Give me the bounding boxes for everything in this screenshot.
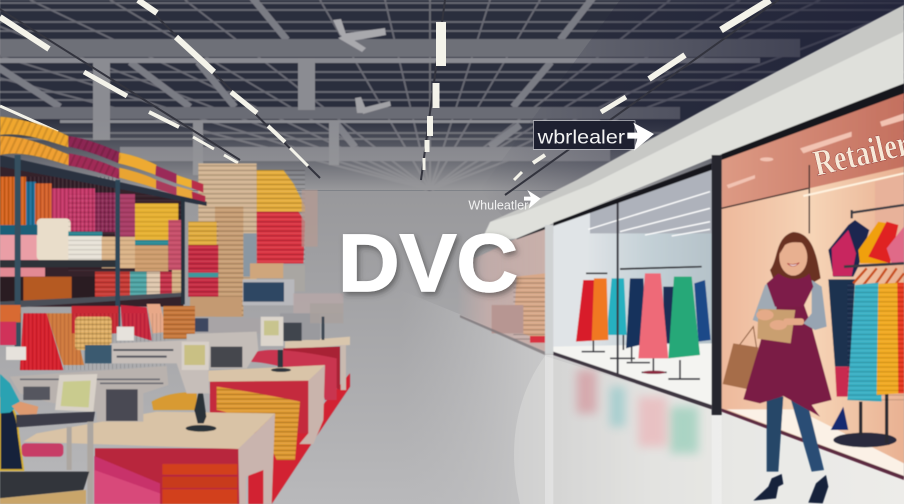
shoes right xyxy=(808,475,828,503)
shelf stacks xyxy=(0,194,182,277)
shopping bag xyxy=(723,343,758,390)
hair xyxy=(770,232,821,283)
bottom desk top xyxy=(0,472,89,498)
front monitor screen xyxy=(182,342,209,370)
desk xyxy=(16,412,95,427)
navy dress back xyxy=(694,280,711,342)
dark ceiling near storefront xyxy=(480,0,904,225)
far table xyxy=(250,337,350,400)
right light strips xyxy=(514,0,770,180)
bottom edge xyxy=(553,352,712,409)
red garment xyxy=(897,283,904,393)
pillar xyxy=(545,225,554,353)
stand bases xyxy=(642,371,666,374)
shelf back xyxy=(0,157,183,307)
title DVC: DVC xyxy=(338,218,518,309)
stand poles xyxy=(861,393,887,443)
glass mullion xyxy=(617,200,619,377)
top edge xyxy=(553,163,712,226)
coat xyxy=(743,305,832,417)
storefront post xyxy=(712,155,722,415)
pink dress xyxy=(638,273,668,358)
storefront xyxy=(457,5,904,503)
small sign text: Whuleatler xyxy=(468,197,529,212)
pink mannequin xyxy=(887,227,904,263)
pillar reflections xyxy=(545,355,722,504)
scarf xyxy=(767,273,813,307)
red floor strip xyxy=(248,373,350,504)
ceiling posts xyxy=(93,58,339,175)
teal garment xyxy=(847,283,882,402)
left leg xyxy=(767,397,783,472)
hanging garments lower rack xyxy=(0,304,195,370)
front monitor xyxy=(55,374,97,412)
hair fringe xyxy=(780,238,805,253)
teal dress xyxy=(607,278,627,335)
envelope bag xyxy=(757,309,795,343)
store back panel xyxy=(875,175,904,250)
fascia xyxy=(480,5,904,243)
ceiling lamps xyxy=(727,113,904,188)
red dress xyxy=(576,280,594,342)
ceiling beam xyxy=(0,39,800,57)
retail floor xyxy=(727,409,904,476)
small far store xyxy=(457,225,545,355)
ceiling fan large xyxy=(333,19,386,52)
wholesaler sign large xyxy=(533,121,654,151)
dress stands xyxy=(582,335,700,379)
reflected dresses xyxy=(577,370,698,453)
second beam xyxy=(0,107,680,119)
sign arrow xyxy=(627,123,654,151)
sweater left arm xyxy=(753,280,777,323)
pink roll xyxy=(22,443,63,457)
rack top rail xyxy=(852,205,904,218)
woman with shopping bag xyxy=(723,232,832,503)
second cross beam xyxy=(60,120,600,123)
ceiling light lines xyxy=(588,192,710,236)
shopping bag handles xyxy=(738,327,757,348)
sweater right arm xyxy=(803,280,827,330)
top edge xyxy=(722,83,904,160)
sign text: wbrlealer xyxy=(537,127,626,148)
bottom edge xyxy=(722,408,904,480)
right leg xyxy=(790,397,824,472)
dark dress xyxy=(663,287,674,343)
orange dress xyxy=(592,278,608,341)
header lines xyxy=(722,165,809,233)
navy dress xyxy=(626,278,647,348)
ceiling cross beam xyxy=(0,58,760,63)
arm xyxy=(12,402,38,415)
hands xyxy=(756,310,804,330)
face xyxy=(779,239,807,276)
chair xyxy=(0,398,23,470)
fade from ceiling into grey haze xyxy=(0,118,904,190)
hangers xyxy=(853,268,904,285)
retail store xyxy=(722,83,904,480)
clothes bar xyxy=(844,263,904,267)
tag labels xyxy=(6,327,134,360)
stand base xyxy=(833,433,897,447)
front table xyxy=(23,412,275,504)
third beam xyxy=(120,147,610,161)
ceiling fan small xyxy=(355,97,391,114)
shoes left xyxy=(753,474,783,501)
middle table xyxy=(208,365,325,460)
front machine head xyxy=(85,339,209,393)
small figure on middle table xyxy=(271,350,291,372)
front machine body xyxy=(10,366,168,422)
clothes rail xyxy=(586,267,702,273)
track rails xyxy=(0,0,795,195)
wholesaler sign small xyxy=(468,190,541,212)
shirt xyxy=(0,374,21,413)
left light strips xyxy=(0,0,308,166)
small figure on front table xyxy=(186,393,216,432)
center light strips xyxy=(424,22,441,170)
middle store xyxy=(553,163,712,409)
sewing machines xyxy=(6,303,343,432)
navy and pink mannequin xyxy=(828,220,869,430)
back stacks of boxes and cloth xyxy=(188,163,343,317)
factory area: shelves, machines and tables xyxy=(0,117,350,504)
shelf frame xyxy=(0,155,207,347)
small sign arrow xyxy=(524,190,541,209)
header light line xyxy=(803,173,904,196)
hanging fabrics upper shelf xyxy=(0,177,116,232)
rear monitor xyxy=(261,317,283,346)
warehouse ceiling xyxy=(0,0,904,190)
lower shelf cloth xyxy=(0,270,182,302)
light fixtures xyxy=(0,0,795,195)
right floor with reflections xyxy=(400,290,904,504)
far pedestal xyxy=(322,317,324,340)
rear machine xyxy=(187,318,260,368)
orange mannequin xyxy=(858,222,898,263)
smile xyxy=(787,263,799,266)
desk legs xyxy=(67,422,93,504)
far machines xyxy=(280,303,343,341)
curved reflection xyxy=(514,356,904,504)
bottom desk wood xyxy=(0,490,86,504)
worker with chair and desk xyxy=(0,374,95,504)
rack and garments xyxy=(828,205,904,447)
fabric rolls on top shelf xyxy=(0,117,205,202)
sign plate xyxy=(533,121,635,149)
green dress xyxy=(668,277,700,358)
yellow fabric behind machine xyxy=(152,392,197,410)
yellow garment xyxy=(877,283,900,395)
